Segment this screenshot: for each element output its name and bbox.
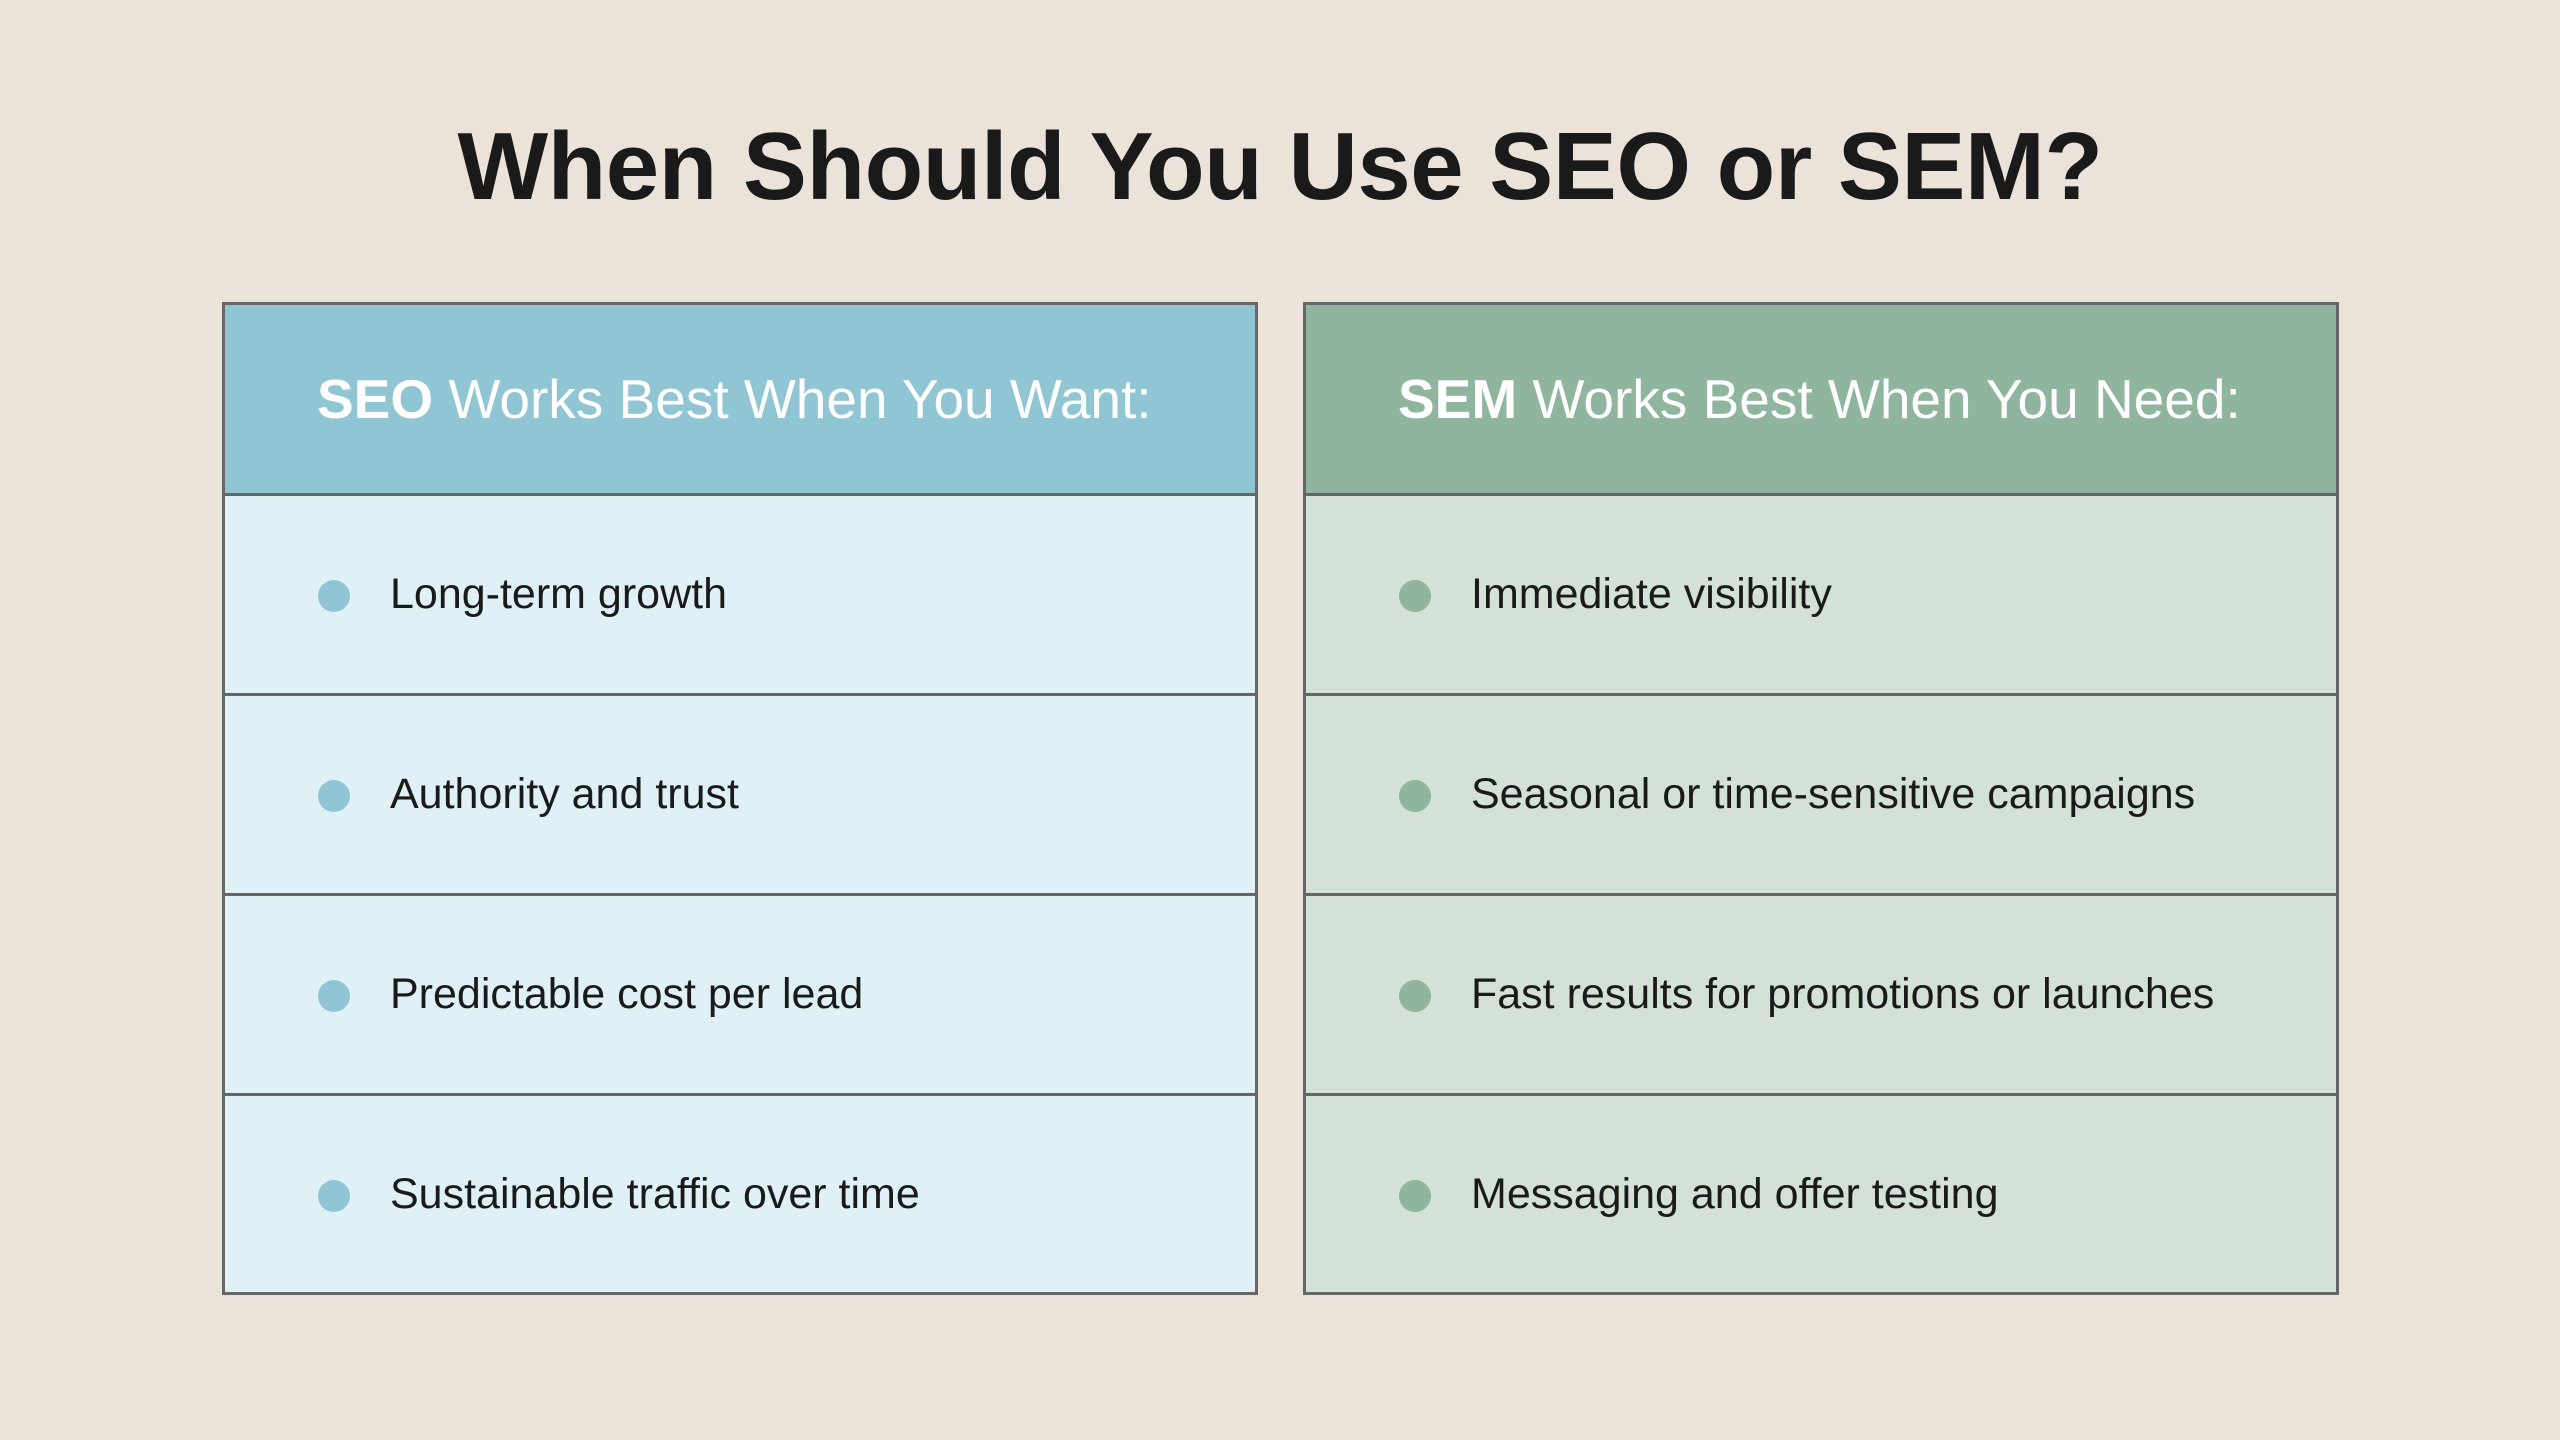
row: long-term growth <box>225 496 1255 696</box>
header: SEM <box>1306 305 2336 496</box>
title: When Should You Use SEO or SEM? <box>457 113 2103 220</box>
row: authority: Authority and trust <box>390 770 739 818</box>
row: seasonal <box>1306 696 2336 896</box>
header: SEO: SEO Works Best When You Want: <box>317 368 1152 430</box>
header: SEO <box>225 305 1255 496</box>
row: authority <box>225 696 1255 896</box>
header: SEM: SEM Works Best When You Need: <box>1398 368 2241 430</box>
row: predictable cost: Predictable cost per lead <box>390 970 863 1018</box>
panel: SEO <box>222 302 1258 1295</box>
row: immediate visibility <box>1306 496 2336 696</box>
row: immediate visibility: Immediate visibility <box>1471 570 1832 618</box>
row: messaging: Messaging and offer testing <box>1471 1170 1998 1218</box>
row: fast results <box>1306 896 2336 1096</box>
row: fast results: Fast results for promotions or launches <box>1471 970 2214 1018</box>
row: sustainable traffic: Sustainable traffic over time <box>390 1170 920 1218</box>
row: long-term growth: Long-term growth <box>390 570 727 618</box>
row: predictable cost <box>225 896 1255 1096</box>
row: seasonal: Seasonal or time-sensitive campaigns <box>1471 770 2195 818</box>
panel: SEM <box>1303 302 2339 1295</box>
